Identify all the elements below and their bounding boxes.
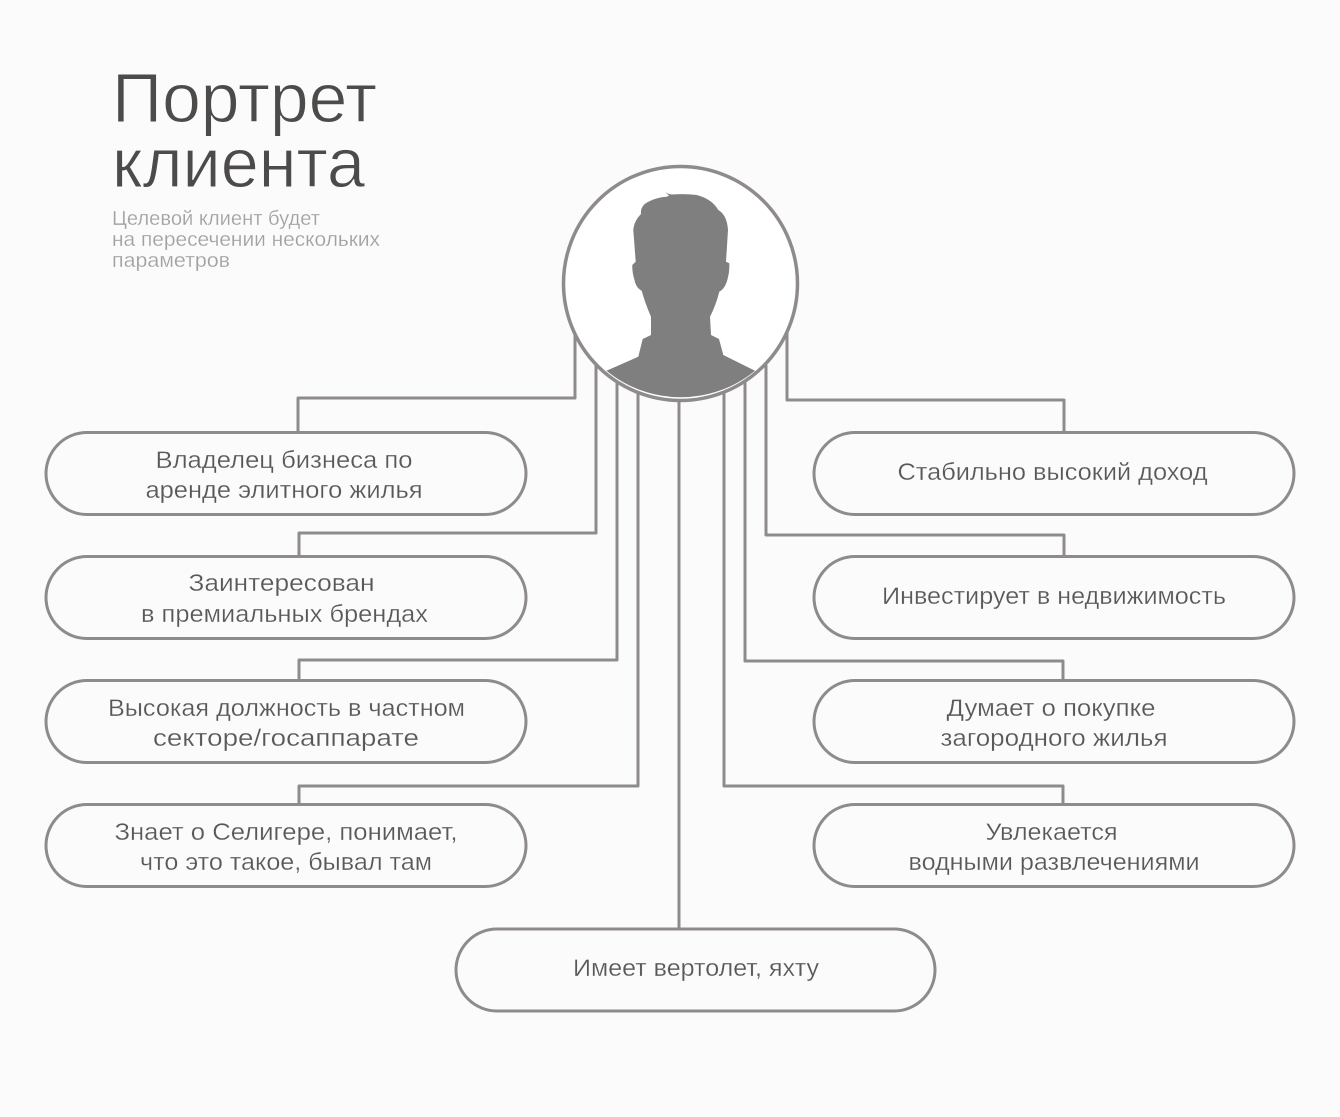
subtitle: Целевой клиент будет (112, 208, 320, 230)
pill: premium brands: в премиальных брендах (141, 601, 428, 628)
subtitle (112, 208, 380, 272)
pill: stable income: Стабильно высокий доход (898, 459, 1208, 486)
pill: knows Seliger (46, 804, 526, 886)
pill: business owner (46, 432, 526, 514)
pill: knows Seliger: что это такое, бывал там (140, 849, 432, 876)
pill: premium brands (46, 556, 526, 638)
connector lines (298, 330, 1064, 929)
subtitle: параметров (112, 250, 230, 272)
pill: real estate investing: Инвестирует в недвижимость (882, 583, 1226, 610)
pill: business owner: аренде элитного жилья (146, 477, 422, 504)
pill: high position: Высокая должность в частном (108, 695, 465, 722)
pill: country home (814, 680, 1294, 762)
title (112, 59, 377, 202)
pill: water activities (814, 804, 1294, 886)
pill: helicopter and yacht: Имеет вертолет, яхту (573, 955, 819, 982)
portrait circle (564, 166, 798, 400)
pill: real estate investing (814, 556, 1294, 638)
title: Портрет (112, 59, 377, 137)
pill: high position (46, 680, 526, 762)
pill: stable income (814, 432, 1294, 514)
title: клиента (112, 124, 365, 202)
pill: country home: Думает о покупке (946, 695, 1156, 722)
pill: water activities: водными развлечениями (908, 849, 1200, 876)
pill: knows Seliger: Знает о Селигере, понимает, (114, 819, 458, 846)
icon: person silhouette (606, 192, 755, 397)
pill: high position: секторе/госаппарате (153, 725, 419, 752)
pill: premium brands: Заинтересован (188, 570, 374, 597)
pill: country home: загородного жилья (940, 725, 1168, 752)
pill: helicopter and yacht (456, 929, 935, 1011)
pill: business owner: Владелец бизнеса по (156, 447, 412, 474)
pill: water activities: Увлекается (986, 819, 1118, 846)
subtitle: на пересечении нескольких (112, 229, 380, 251)
